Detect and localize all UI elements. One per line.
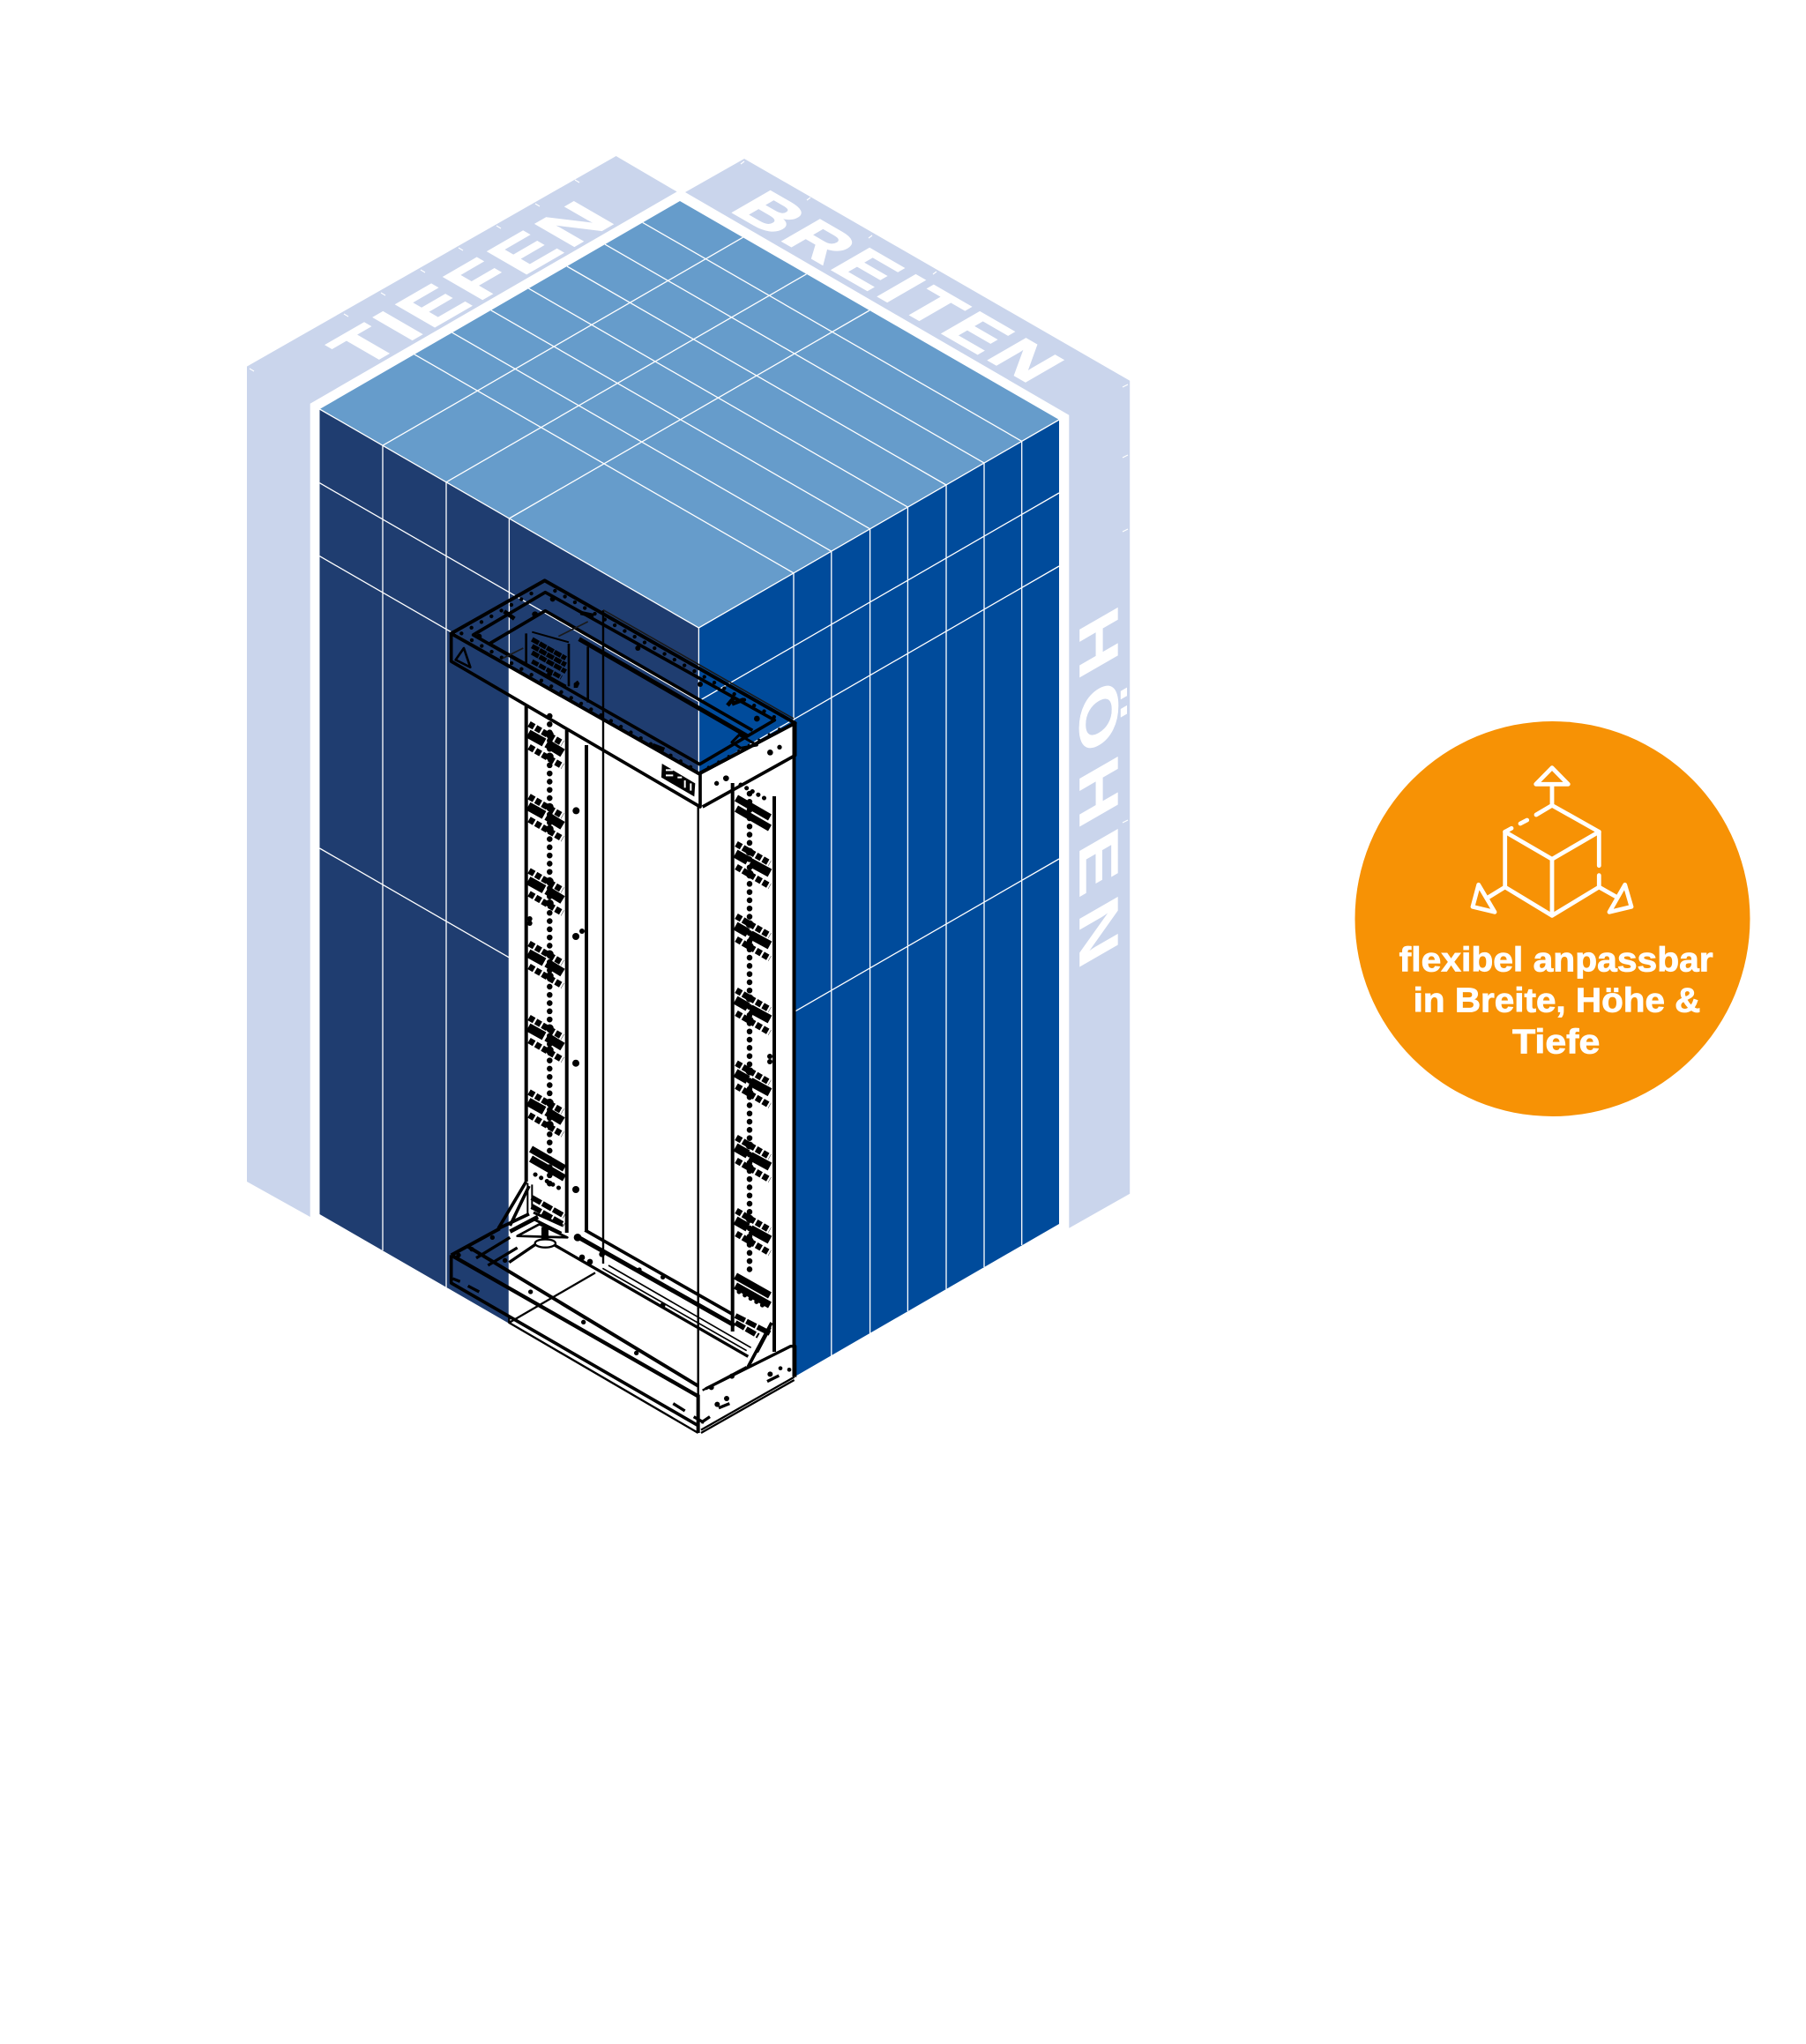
badge: flexibel anpassbar xyxy=(1354,721,1750,1116)
text: badge caption: in Breite, Höhe & xyxy=(1414,982,1700,1020)
small ticks on strips xyxy=(250,161,1128,823)
label: BREITEN: BREITEN xyxy=(716,182,1083,393)
block: right face xyxy=(698,420,1059,1432)
rack: top hardware block xyxy=(503,622,588,703)
rack: bottom frame xyxy=(452,1182,795,1433)
label: HÖHEN: HÖHEN xyxy=(1068,596,1129,993)
rack: top frame xyxy=(452,580,795,807)
label: TIEFEN: TIEFEN xyxy=(313,190,633,375)
rack: vertical posts xyxy=(526,610,794,1433)
block: left face xyxy=(319,409,698,1433)
rack: data plate xyxy=(661,764,695,796)
text: badge caption xyxy=(1399,942,1713,1061)
rack frame drawing xyxy=(452,580,795,1433)
panel: TIEFEN strip xyxy=(247,156,677,1217)
rack: white body xyxy=(509,666,795,1433)
rack: left rail holes xyxy=(527,716,585,1225)
panel: BREITEN strip xyxy=(685,159,1130,1228)
block: top face xyxy=(319,201,1059,882)
text: badge caption: Tiefe xyxy=(1512,1023,1600,1061)
rack: right rail holes xyxy=(735,785,772,1336)
text: badge caption: flexibel anpassbar xyxy=(1399,942,1713,980)
icon: cube with three arrows xyxy=(1473,768,1631,915)
